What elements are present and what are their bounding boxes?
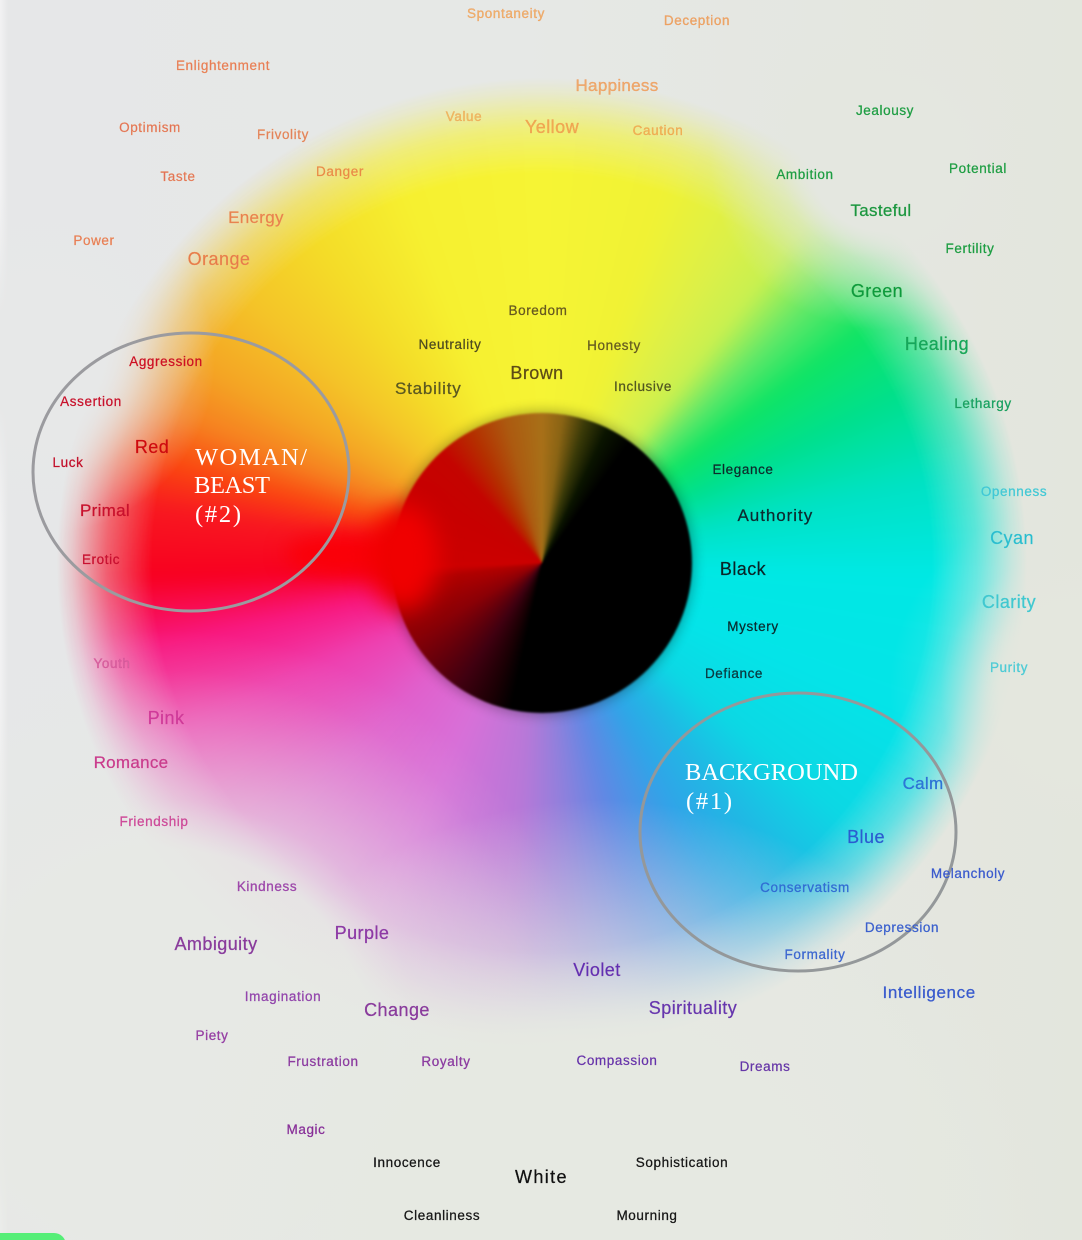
purple and violet word group: Kindness — [237, 879, 297, 894]
purple and violet word group: Ambiguity — [174, 934, 258, 954]
black word group: Mystery — [727, 619, 779, 634]
callout text: background — [685, 759, 858, 815]
callout: woman/beast ellipse — [33, 333, 349, 611]
orange and yellow word group: Optimism — [119, 120, 181, 135]
red word group — [53, 354, 203, 567]
orange and yellow word group: Enlightenment — [176, 58, 270, 73]
black word group: Black — [720, 559, 767, 579]
purple and violet word group: Compassion — [576, 1053, 658, 1068]
brown word group: Honesty — [587, 338, 641, 353]
red word group: Erotic — [82, 552, 120, 567]
red glow on disk left edge — [368, 505, 438, 610]
purple and violet word group: Royalty — [421, 1054, 471, 1069]
white word group: Sophistication — [636, 1155, 728, 1170]
green word group: Green — [851, 281, 903, 301]
orange and yellow word group: Spontaneity — [467, 6, 545, 21]
callout text: woman/beast: (#2) — [195, 501, 241, 528]
pink word group: Pink — [148, 708, 185, 728]
purple and violet word group: Dreams — [740, 1059, 790, 1074]
blue word group: Conservatism — [760, 880, 850, 895]
green corner fragment — [0, 1233, 66, 1240]
blue word group: Formality — [785, 947, 845, 962]
white word group: Innocence — [373, 1155, 441, 1170]
callout text: background: BACKGROUND — [685, 759, 858, 786]
orange and yellow word group: Caution — [633, 123, 683, 138]
green word group: Fertility — [946, 241, 994, 256]
green word group — [776, 103, 1012, 411]
black word group: Authority — [738, 506, 813, 525]
purple and violet word group — [174, 879, 790, 1137]
white word group: White — [515, 1167, 567, 1187]
black word group — [705, 462, 813, 681]
cyan word group: Purity — [990, 660, 1028, 675]
red word group: Primal — [80, 501, 130, 520]
purple and violet word group: Change — [364, 1000, 430, 1020]
blue word group: Calm — [903, 774, 943, 793]
cyan word group: Clarity — [982, 592, 1036, 612]
purple and violet word group: Imagination — [245, 989, 321, 1004]
red word group: Red — [135, 437, 169, 457]
red word group: Assertion — [60, 394, 122, 409]
white word group: Mourning — [616, 1208, 678, 1223]
blue word group: Blue — [847, 827, 885, 847]
orange and yellow word group: Value — [446, 109, 482, 124]
white word group: Cleanliness — [404, 1208, 480, 1223]
orange and yellow word group: Yellow — [525, 117, 580, 137]
brown word group: Neutrality — [418, 337, 482, 352]
callout: background ellipse — [640, 693, 956, 971]
purple and violet word group: Spirituality — [649, 998, 737, 1018]
callout text: woman/beast: WOMAN/ — [195, 444, 307, 471]
brown word group: Inclusive — [614, 379, 672, 394]
cyan word group: Openness — [981, 484, 1047, 499]
green word group: Tasteful — [850, 201, 912, 220]
white word group — [373, 1155, 728, 1223]
cyan word group: Cyan — [990, 528, 1034, 548]
pink word group — [93, 656, 189, 829]
green word group: Lethargy — [954, 396, 1012, 411]
pink word group: Youth — [93, 656, 131, 671]
red word group: Luck — [53, 455, 83, 470]
central dark disk — [392, 413, 692, 713]
blue word group — [760, 774, 1005, 1002]
pink word group: Friendship — [119, 814, 189, 829]
purple and violet word group: Magic — [286, 1122, 326, 1137]
green word group: Jealousy — [856, 103, 914, 118]
green word group: Potential — [949, 161, 1007, 176]
orange and yellow word group: Taste — [160, 169, 196, 184]
green word group: Ambition — [776, 167, 834, 182]
orange and yellow word group: Orange — [188, 249, 250, 269]
black word group: Defiance — [705, 666, 763, 681]
blue word group: Depression — [865, 920, 939, 935]
purple and violet word group: Purple — [335, 923, 389, 943]
red spike left of disk — [285, 534, 405, 574]
purple and violet word group: Violet — [573, 960, 621, 980]
callout text: woman/beast — [194, 444, 307, 528]
orange and yellow word group: Frivolity — [257, 127, 309, 142]
brown word group: Brown — [510, 363, 564, 383]
purple and violet word group: Frustration — [287, 1054, 359, 1069]
orange and yellow word group: Deception — [664, 13, 730, 28]
blue word group: Melancholy — [931, 866, 1005, 881]
brown word group: Stability — [395, 379, 461, 398]
orange and yellow word group: Danger — [316, 164, 364, 179]
brown word group: Boredom — [509, 303, 567, 318]
pink word group: Romance — [94, 753, 168, 772]
red word group: Aggression — [129, 354, 203, 369]
colour wheel gradient — [60, 83, 1022, 1011]
blue word group: Intelligence — [882, 983, 976, 1002]
callout text: woman/beast: BEAST — [194, 472, 270, 499]
orange and yellow word group: Power — [73, 233, 115, 248]
purple and violet word group: Piety — [195, 1028, 229, 1043]
green word group: Healing — [905, 334, 969, 354]
orange and yellow word group: Happiness — [575, 76, 659, 95]
black word group: Elegance — [712, 462, 774, 477]
cyan word group — [981, 484, 1047, 675]
callout text: background: (#1) — [686, 788, 732, 815]
orange and yellow word group: Energy — [228, 208, 284, 227]
orange and yellow word group — [73, 6, 730, 269]
brown word group — [395, 303, 672, 398]
